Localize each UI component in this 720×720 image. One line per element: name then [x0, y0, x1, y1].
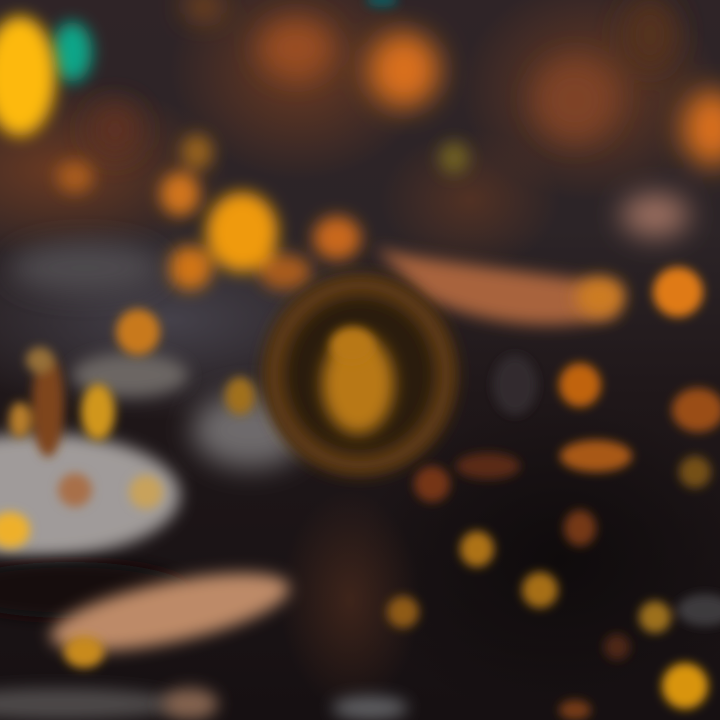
bokeh: yellow and green light top left — [0, 0, 469, 193]
bokeh: right side orange lights — [387, 355, 720, 720]
plate: amber details — [0, 309, 255, 548]
bokeh: upper orange lights — [89, 0, 720, 237]
saucer: peach shape lower left — [0, 557, 408, 720]
plate: grey disc left — [0, 244, 308, 618]
coin: central ring with amber figure — [265, 277, 455, 473]
bokeh: central amber cluster — [160, 134, 361, 290]
streak: peach beam behind coin — [375, 248, 703, 325]
